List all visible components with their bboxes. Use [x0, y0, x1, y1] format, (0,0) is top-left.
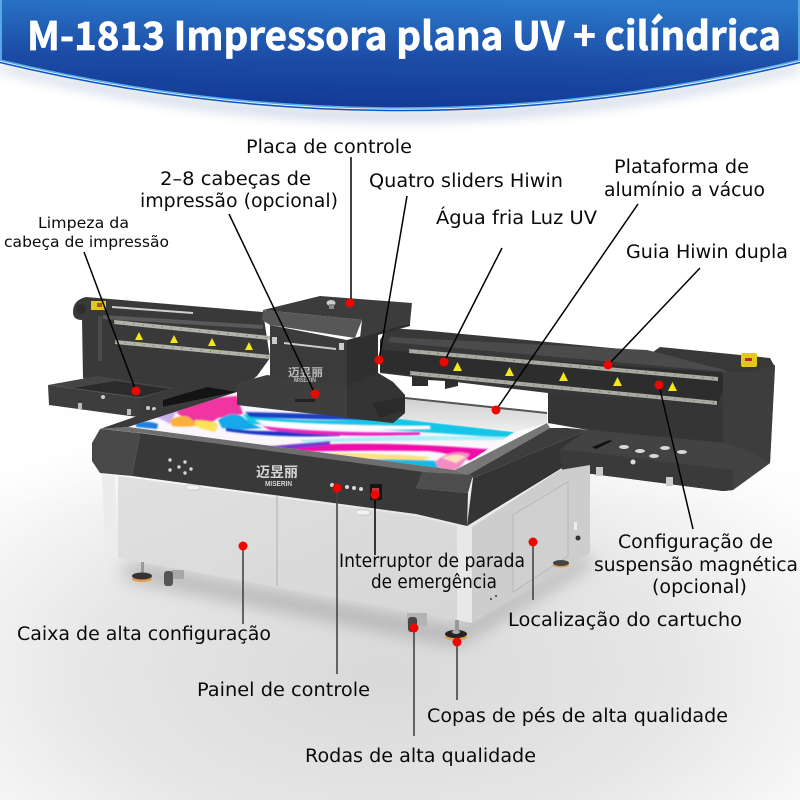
- line: cartucho: [532, 542, 534, 600]
- brand logo: 迈昱丽: [256, 462, 298, 482]
- label: rodas: Rodas de alta qualidade: [305, 746, 536, 767]
- machine cabinet: [102, 465, 590, 623]
- line: cabeças de impressão: [229, 214, 315, 394]
- label: limpeza: [4, 214, 169, 251]
- label: plataforma: alumínio a vácuo: [604, 180, 765, 201]
- right foot rear: [553, 560, 569, 568]
- label: suspensão magnética: (opcional): [652, 577, 747, 598]
- warning triangles: [453, 362, 677, 391]
- panel buttons: [330, 483, 363, 491]
- label: suspensão magnética: suspensão magnética: [594, 555, 798, 576]
- front frame face: [132, 433, 423, 514]
- carriage logo: 迈昱丽: [288, 364, 323, 380]
- emergency stop button: [741, 353, 757, 367]
- label: caixa: Caixa de alta configuração: [17, 624, 271, 645]
- print carriage: [237, 296, 412, 423]
- right frame inner strip: [455, 423, 550, 475]
- label: cartucho: Localização do cartucho: [508, 610, 742, 631]
- label: suspensão magnética: Configuração de: [618, 532, 773, 553]
- colourful print: [134, 392, 515, 470]
- warning triangles: [135, 332, 253, 350]
- label: suspensão magnética: [594, 532, 798, 598]
- label: plataforma: [604, 157, 765, 201]
- front frame top strip: [100, 427, 468, 475]
- line: água fria: [444, 248, 502, 362]
- right frame top: [468, 428, 588, 478]
- line: quatro sliders: [379, 196, 407, 360]
- leader lines: [84, 157, 700, 736]
- label: copas: Copas de pés de alta qualidade: [427, 706, 728, 727]
- label: placa de controle: Placa de controle: [246, 137, 412, 158]
- left cleaning tray: [48, 376, 237, 417]
- right beam and tray: [380, 328, 775, 491]
- label: interruptor: Interruptor de parada: [339, 551, 525, 572]
- label: interruptor: de emergência: [371, 572, 497, 593]
- line: plataforma: [496, 204, 638, 410]
- right corner cap: [416, 472, 473, 493]
- label: limpeza: cabeça de impressão: [4, 233, 169, 251]
- left rear beam: [73, 297, 270, 392]
- left corner cap: [92, 429, 140, 476]
- left foot and caster: [132, 562, 184, 586]
- label: cabeças de impressão: impressão (opcional): [140, 191, 338, 212]
- label: água fria: Água fria Luz UV: [436, 207, 597, 229]
- marker dots: [132, 298, 664, 646]
- label: plataforma: Plataforma de: [614, 157, 749, 178]
- label: quatro sliders: Quatro sliders Hiwin: [369, 171, 563, 192]
- floor shadow: [125, 552, 590, 645]
- printer illustration: [48, 296, 775, 645]
- label: cabeças de impressão: 2–8 cabeças de: [160, 169, 311, 190]
- front foot: [445, 620, 467, 640]
- line: rodas: [413, 628, 415, 736]
- carriage logo: MISERIN: [294, 378, 316, 384]
- line: painel de controle: [336, 488, 338, 674]
- title: M-1813 Impressora plana UV + cilíndrica: [27, 6, 781, 62]
- print bed: [92, 385, 588, 526]
- front caster: [407, 613, 427, 632]
- line: suspensão magnética: [659, 385, 693, 529]
- bed left rail: [100, 392, 237, 429]
- line: placa de controle: [350, 157, 352, 303]
- label: guia hiwin: Guia Hiwin dupla: [626, 242, 788, 263]
- line: copas de pés: [456, 642, 458, 700]
- line: guia hiwin: [608, 268, 700, 365]
- brand logo: MISERIN: [265, 481, 292, 488]
- label: limpeza: Limpeza da: [38, 214, 129, 232]
- line: interruptor: [374, 495, 376, 555]
- label: interruptor: [339, 551, 525, 593]
- control keypad: [168, 458, 193, 475]
- label: painel: Painel de controle: [197, 680, 370, 701]
- floor background: [0, 380, 800, 800]
- line: limpeza: [84, 252, 136, 391]
- line: caixa: [242, 546, 244, 624]
- header banner: [0, 0, 800, 120]
- label: cabeças de impressão: [140, 169, 338, 212]
